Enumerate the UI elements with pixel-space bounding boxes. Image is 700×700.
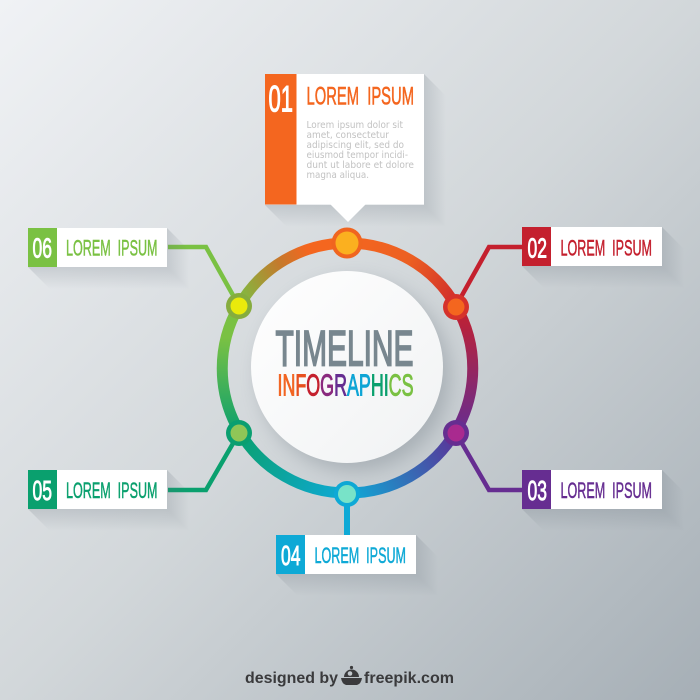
body text 01: eiusmod tempor incidi-: [306, 150, 408, 161]
panel 02: [522, 227, 684, 288]
panel 04: [276, 535, 438, 596]
timeline ring: [222, 243, 473, 493]
body text 01: adipiscing elit, sed do: [306, 140, 404, 151]
body text 01: dunt ut labore et dolore: [306, 160, 414, 171]
body text 01: Lorem ipsum dolor sit: [306, 120, 403, 131]
number 03: 03: [528, 475, 547, 506]
center circle: [251, 271, 450, 471]
timeline nodes: [226, 228, 469, 507]
icon: freepik logo: [341, 666, 362, 685]
number 06: 06: [32, 232, 52, 264]
body text 01: magna aliqua.: [306, 170, 369, 181]
number 04: 04: [281, 540, 300, 571]
number 02: 02: [528, 232, 547, 264]
heading 05: LOREM IPSUM: [66, 478, 158, 503]
footer credit: [245, 666, 454, 687]
heading 01: LOREM IPSUM: [306, 82, 414, 110]
title: infographics: INFOGRAPHICS: [278, 368, 414, 402]
heading 04: LOREM IPSUM: [314, 543, 406, 568]
number 05: 05: [32, 475, 52, 506]
panel 05: [28, 470, 189, 531]
panel 01: [265, 74, 446, 227]
footer credit: freepik.com: [364, 670, 454, 687]
connector lines: [168, 247, 522, 536]
body text 01: [306, 120, 414, 181]
panel 06: [28, 228, 189, 289]
body text 01: amet, consectetur: [306, 130, 389, 141]
number 01: 01: [268, 78, 293, 120]
title: timeline: TIMELINE: [276, 320, 414, 376]
panel 03: [522, 470, 684, 531]
heading 06: LOREM IPSUM: [66, 236, 158, 260]
footer credit: designed by: [245, 670, 338, 687]
